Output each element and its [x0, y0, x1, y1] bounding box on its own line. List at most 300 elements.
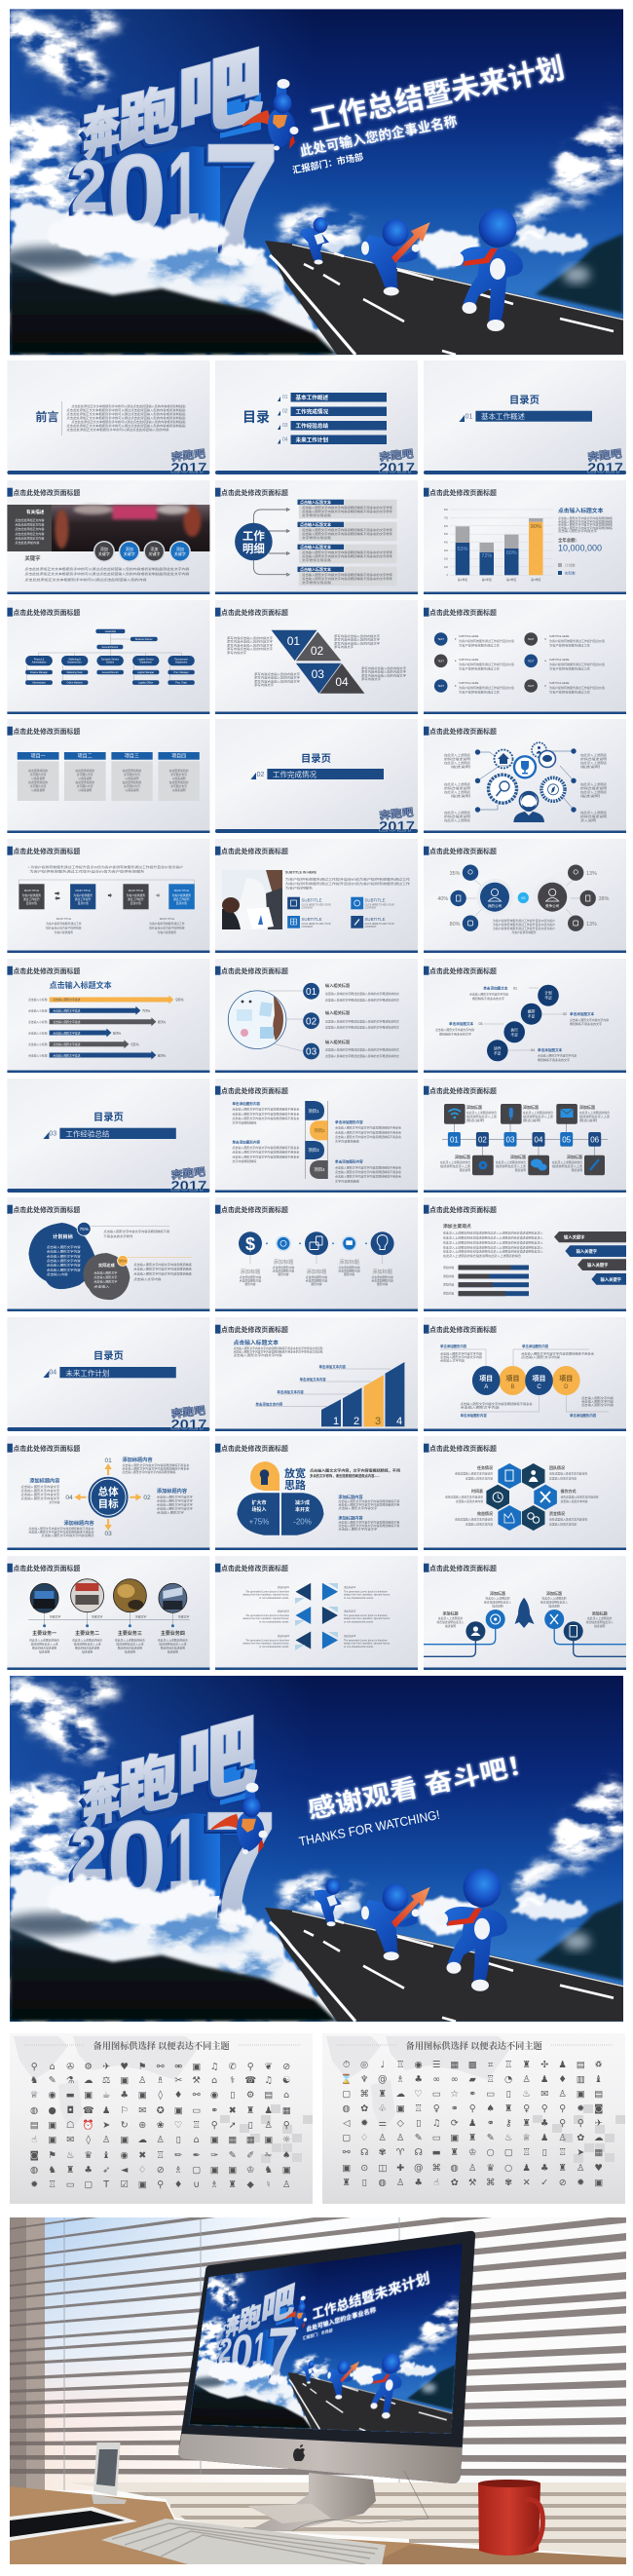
- step labels: [255, 1364, 391, 1407]
- step numbers 01-06: 05: [562, 1135, 572, 1144]
- caption 3: 描述说明: [548, 1604, 560, 1608]
- text blocks: 描述说明: [580, 765, 600, 769]
- text blocks: 的综合描述说明: [580, 814, 607, 818]
- item right 2: TEXT: [528, 659, 535, 663]
- detail box 2: 文字修饰言简意赅: [302, 536, 331, 540]
- keyword tag 1: [554, 1231, 626, 1242]
- note upper left: 点击输入文字内容: [440, 1358, 465, 1362]
- flow box 3: 为客户提供服务: [127, 893, 145, 897]
- bar chart: 53%: [457, 547, 468, 552]
- intro text: 多余的文字修饰，请言简意赅的阐述观点内容......: [310, 1473, 380, 1478]
- org nodes: Finance &: [34, 659, 45, 661]
- milestone 3: 图表的综合描述说明: [118, 1647, 142, 1650]
- photo: crowd: [52, 505, 209, 551]
- text block right 1: 点击输入图形文字内容文字内容需概括精炼不用多余: [335, 1130, 401, 1134]
- step numbers 01-06: 01: [450, 1135, 459, 1144]
- arrow 90%: 点击输入图形文字描述: [53, 998, 81, 1002]
- arrow 70%: 点击输入图形文字描述: [53, 1009, 81, 1013]
- step labels: 单击添加文本内容: [319, 1364, 347, 1369]
- text blocks: 在此录入上述图表: [444, 761, 470, 765]
- text left: or non-characteristic words.: [259, 1597, 289, 1600]
- circle 执行不足: [503, 1021, 525, 1042]
- chart heading and total: 10,000,000: [558, 542, 602, 553]
- note 04: 单击添加图文本: [538, 1047, 563, 1052]
- side text 1: 点击输入图形文字内容文字: [338, 1506, 378, 1510]
- milestone 4: 描述说明: [168, 1650, 178, 1654]
- hexagon: 任务情况: [498, 1463, 521, 1489]
- milestone 2: 描述说明: [82, 1650, 93, 1654]
- note 02: 点击输入图形文字内容文字内容: [570, 1018, 609, 1022]
- detail box 1: 点击输入标题文本: [300, 499, 331, 505]
- body text: 点击此处添加正文文本根据您手中的可以通过点击此按钮输入您的内容或者复制粘贴: [66, 424, 186, 428]
- label 5: 点击添加图形内容: [371, 1275, 393, 1279]
- slide: project A-D ellipses: [424, 1317, 626, 1431]
- upper label 1: 描述说明在此录入上述: [466, 1115, 497, 1118]
- slide: four project cards: [7, 719, 209, 833]
- goal text top: [122, 1456, 190, 1474]
- keyword badges: 关键字: [174, 550, 186, 556]
- title: [424, 1564, 497, 1572]
- callout text 2: 点击输入文字内容: [133, 1277, 162, 1281]
- milestone 1: 主要业务一: [32, 1630, 56, 1637]
- flow box 4: 为客户提供服务: [172, 893, 191, 897]
- label 3: 点击添加图形内容: [306, 1275, 327, 1279]
- title: [7, 847, 80, 855]
- text left: always free from repetition, injected humor,: [242, 1643, 289, 1646]
- icon: compass gear: [541, 777, 565, 801]
- triangles left: [295, 1583, 311, 1650]
- intro text: 为客户提供有效服务通过工作提升自身价值为客户提供有效服务: [29, 870, 145, 874]
- icon grid: ☝▣✉◊♙▣☁♙▯⌂▣▦▦▣☼: [31, 2135, 290, 2145]
- card 2: 在这里添加您的: [75, 769, 94, 773]
- card 1: 文字图片也可: [30, 784, 47, 788]
- description panel: 点击此处添加正文内容: [15, 523, 45, 527]
- goal text top: 点击输入图形文字内容文字内容需概括精炼不用多余: [122, 1463, 190, 1467]
- labels right: 这里输入段落文本内容: [561, 1499, 588, 1503]
- text block left 1: 文字内容概括精炼: [232, 1121, 257, 1125]
- icon: target: [472, 1155, 494, 1175]
- goal text bottom: 点击输入图形文字内容文字内容需概括: [41, 1534, 94, 1537]
- detail box 4: 点击输入标题文本: [300, 566, 331, 572]
- title: 点击此处修改页面标题: [429, 1564, 497, 1572]
- caption 4: 在此录入上述图表的: [587, 1616, 612, 1620]
- icon grid: ◍●◘☎♟⚐✉✪▣▭⚭✖♜♟▦: [30, 2105, 291, 2116]
- text block left 2: 单击添加图形内容: [232, 1139, 261, 1144]
- bar chart: 600: [444, 525, 449, 528]
- body text: 点击此处添加正文文本根据您手中的可以通过点击此按钮输入您的内容或者复制粘贴: [66, 412, 186, 416]
- label 4: 添加标题: [339, 1258, 359, 1266]
- 3D headline: 奔跑吧 2017: 跑: [119, 1746, 178, 1827]
- slide: 目录页 01: [424, 360, 626, 476]
- milestone 4: 描述说明在此录入上述: [159, 1643, 187, 1647]
- text block left 2: 文字内容概括精炼: [232, 1159, 257, 1163]
- figure: large runner: [450, 208, 523, 331]
- panel heading: 备用图标供选择 以便表达不同主题: [406, 2040, 543, 2051]
- actual blob: 实际达成: [98, 1262, 116, 1269]
- right metric 38%: 38%: [599, 896, 610, 902]
- text left: The generated Lorem Ipsum is therefore: [245, 1614, 290, 1617]
- title: [424, 727, 497, 736]
- flow box 2: MAIN TITLE: [76, 889, 91, 892]
- keyword badges: 添加: [126, 546, 133, 551]
- arrow 80%: 80%: [158, 1019, 167, 1025]
- milestone 3: 关键文字: [135, 1613, 147, 1619]
- text blocks: 的综合描述说明: [580, 786, 607, 790]
- subtitle item 1: CLICK HERE TO ADD YOUR: [302, 902, 331, 906]
- step text left top: 添写内容点击输入您的内容文字: [227, 643, 273, 647]
- text right: [344, 1585, 391, 1648]
- item left 1: TEXT: [437, 637, 444, 641]
- card 2: 以用来说明: [78, 777, 92, 780]
- VS badge: [518, 892, 529, 903]
- flow box 3: 通过工作提升: [128, 897, 144, 901]
- note 02: 概括精炼不用多余的文字: [570, 1022, 602, 1026]
- labels left: 任务情况: [477, 1464, 493, 1470]
- cloud in front of letters: [49, 214, 261, 260]
- section bar: 未来工作计划: [65, 1368, 109, 1378]
- card 4: 以用来说明: [172, 777, 186, 780]
- arrow 80%: 点击输入小标题: [28, 1020, 48, 1024]
- caption 3: 在此录入上述图表的: [541, 1596, 567, 1600]
- caption 2: 综合描述说明在此录入: [484, 1600, 511, 1604]
- item right 1: [524, 632, 605, 647]
- point 02: [303, 1009, 399, 1030]
- icon: chat: [528, 1155, 549, 1175]
- point 01: 输入相关标题: [325, 982, 351, 989]
- goal text right: 点击输入图形文字内容文字: [157, 1498, 193, 1502]
- org nodes: Proc. Team: [175, 681, 187, 684]
- section bar: 01: [465, 413, 472, 421]
- 3D headline: 奔跑吧 2017: 跑: [119, 79, 178, 160]
- comparison text: [493, 919, 555, 934]
- text right: or non-characteristic words.: [344, 1621, 374, 1624]
- heading: 目录页: [93, 1349, 124, 1362]
- caption left: MAIN TITLE: [56, 917, 71, 921]
- icon grid: ◙⚑♨♛♝◉✖♖✏✒✑✎✐✁♠: [30, 2150, 290, 2161]
- labels left: 这里输入段落文本内容: [465, 1477, 493, 1481]
- actual blob: 点击输入图形文字: [93, 1270, 118, 1274]
- labels left: 效益情况: [477, 1510, 493, 1516]
- milestone 2: 描述说明在此录入上述: [74, 1643, 101, 1647]
- detail box 1: 文字修饰言简意赅: [302, 513, 331, 517]
- circle 编排不足: 编排: [528, 1009, 536, 1014]
- step bar 4: 4: [396, 1416, 402, 1427]
- note 04: 概括精炼不用多余的文字: [538, 1058, 570, 1062]
- text right: 添加内容05: [344, 1610, 356, 1613]
- arrow 50%: [28, 1029, 122, 1037]
- contents item 01: 01: [282, 395, 288, 400]
- world map backdrop: [326, 2036, 512, 2134]
- text blocks: 在此录入上述图表: [580, 782, 607, 786]
- tab 项目2: 项目2: [314, 1128, 325, 1134]
- arrow 80%: 80%: [158, 1053, 167, 1058]
- text blocks: 在此录入上述图表: [444, 782, 470, 786]
- labels right: 这里输入段落文本内容: [549, 1522, 577, 1526]
- side text 2: [338, 1514, 400, 1532]
- ellipse A: 项目: [479, 1375, 493, 1383]
- milestone 1: 关键文字: [50, 1613, 61, 1619]
- keyword badges: 添加: [150, 546, 158, 551]
- bar chart: 第3季度: [506, 577, 516, 582]
- subtitle item 3: CONTENT: [302, 925, 314, 928]
- note lower left: 单击添加图形内容: [461, 1413, 487, 1418]
- text intro: 点击输入图形文字内容文字内容需概括精炼不用多余的文字修饰请言简意赅: [234, 1346, 323, 1350]
- card 3: 文字图片也可: [124, 784, 140, 788]
- note lower right: 点击输入图形文字内容: [581, 1403, 614, 1407]
- ellipse B: [499, 1366, 527, 1395]
- lower label 1: 添加标题: [455, 1154, 470, 1159]
- tab 项目4: [310, 1160, 328, 1179]
- card 4: 在这里添加您的: [169, 780, 189, 784]
- keyword text: 点击此处添加正文文本根据您手中的可以通过点击此按钮输入您的内容: [24, 578, 147, 582]
- thanks subheading: THANKS FOR WATCHING!: [298, 1807, 441, 1849]
- title: 点击此处修改页面标题: [429, 727, 497, 736]
- caption 2: 在此录入上述图表的: [485, 1596, 510, 1600]
- contents item 04: [278, 435, 387, 444]
- figure: large runner: [444, 1869, 507, 1991]
- label 4: 点击添加图形内容: [338, 1266, 360, 1269]
- text intro: 点击输入图形文字内容文字内容: [234, 1353, 282, 1357]
- text left: The generated Lorem Ipsum is therefore: [245, 1590, 290, 1593]
- callout text 2: 点击输入图形文字内容文字内容需概括精炼: [133, 1268, 192, 1271]
- step text right top: 添写内容点击输入您的内容文字: [334, 641, 380, 645]
- text intro: [234, 1339, 323, 1357]
- subtitle item 4: SUBTITLE: [364, 917, 386, 922]
- side text 1: 添加标题内容: [338, 1494, 363, 1500]
- card 2: 项目二: [78, 754, 93, 760]
- label 5: 点击添加图形内容: [371, 1278, 393, 1282]
- note 01: 01: [513, 986, 517, 990]
- labels left: [445, 1464, 493, 1526]
- arrow 80%: 点击输入图形文字描述: [53, 1053, 81, 1057]
- plan blob: 计划目标: [53, 1232, 74, 1240]
- blob 扩大市场投入: [237, 1493, 279, 1535]
- timeline axis: [28, 1612, 190, 1625]
- chart heading and total: 点击输入图形文字内容文字: [558, 529, 597, 533]
- text left: 添加内容01: [278, 1585, 290, 1589]
- title: 点击此处修改页面标题: [13, 1205, 80, 1214]
- text left: The generated Lorem Ipsum is therefore: [245, 1639, 290, 1642]
- contents item 02: [278, 407, 387, 416]
- intro text: [310, 1467, 401, 1478]
- note upper right: [521, 1344, 594, 1359]
- caption 2: 描述说明: [492, 1604, 503, 1608]
- callout text 2: [133, 1263, 192, 1281]
- title: [215, 1325, 288, 1334]
- ellipse A: [472, 1366, 501, 1395]
- card 1: 文字图片也可: [30, 773, 47, 777]
- subtitle item 1: CONTENT: [302, 906, 314, 910]
- text right: The generated Lorem Ipsum is therefore: [344, 1639, 388, 1642]
- bar chart: 800: [444, 509, 449, 511]
- subtitle and text: 为客户提供有效服务通过工作提升自身价值为客户提供有效服务通过工作: [285, 882, 410, 886]
- 3D block behind letters: [97, 1760, 256, 1906]
- stacked bars: [443, 1265, 529, 1296]
- right metric 13%: [568, 916, 597, 931]
- main point text: [443, 1223, 543, 1258]
- text blocks: 在此录入上述图表: [444, 790, 470, 794]
- stacked bars: 添加内容: [443, 1283, 454, 1287]
- slide: hexagon ring: [424, 1436, 626, 1550]
- circle 协作不足: 不足: [494, 1050, 502, 1055]
- icon: house gear: [495, 750, 512, 768]
- heading: 前言: [35, 409, 58, 424]
- desk wood right: [370, 2545, 626, 2564]
- icon grid: ⚲⌂✇⚙✈♥⚑⚯⚮▣♫✆⚲❦⊘: [31, 2062, 290, 2072]
- slide: triangle steps: [215, 600, 418, 714]
- point 01: [303, 982, 399, 1002]
- right company circle: 竞争公司: [545, 903, 560, 908]
- card 3: 以用来说明: [125, 788, 139, 792]
- bar chart: 100: [444, 566, 449, 569]
- keyword tag 1: 输入关键字: [564, 1234, 585, 1241]
- bar chart: 90%: [531, 524, 541, 530]
- step bar 1: [321, 1399, 341, 1427]
- circle 执行不足: 执行: [510, 1027, 518, 1032]
- intro text: • 为客户提供有效服务通过工作提升自身价值为客户提供有效服务通过工作提升自身价值为客户: [28, 865, 183, 869]
- icon: envelope: [556, 1104, 577, 1124]
- slide: project tabs: [215, 1079, 418, 1193]
- point 02: 这里输入简单的文字概述这里输入简单的文字概述简单的文: [325, 1019, 399, 1023]
- note 03: 单击添加图文本: [449, 1021, 474, 1026]
- lower label 3: 描述说明在此录入上述: [552, 1164, 582, 1168]
- text right: always free from repetition, injected humor,: [344, 1643, 391, 1646]
- label 5: [371, 1268, 393, 1286]
- centre ellipse: [89, 1477, 129, 1518]
- photo 1: [30, 1583, 58, 1612]
- arrow 65%: 65%: [130, 1042, 139, 1046]
- keyword tag 2: [565, 1245, 626, 1257]
- text block left 1: 单击添加图形内容: [232, 1101, 261, 1106]
- text block right 1: [335, 1119, 401, 1144]
- note 04: [531, 1047, 577, 1062]
- caption 2: [484, 1590, 511, 1608]
- big heading: [284, 1466, 306, 1492]
- stacked bars: 添加内容: [443, 1266, 454, 1269]
- title: [215, 488, 288, 497]
- step text right bottom: 添写内容点击输入您的内容文字: [361, 670, 406, 674]
- bar chart: 400: [444, 542, 449, 545]
- blob 减少成本开支: [281, 1493, 323, 1535]
- contents item 04: 04: [282, 436, 288, 442]
- card 1: 项目一: [31, 754, 46, 760]
- org nodes: Marketing &: [69, 658, 81, 661]
- upper label 3: [579, 1104, 610, 1122]
- note 03: [435, 1021, 483, 1037]
- title: [215, 608, 288, 617]
- detail box 3: 文字修饰言简意赅: [302, 558, 331, 562]
- note 01: 点击输入图形文字内容文字内容: [469, 992, 508, 996]
- card 2: 文字图片也可: [77, 773, 93, 777]
- keyword badges: 关键字: [124, 550, 135, 556]
- labels left: 请在这里输入段落文本内容请在: [455, 1471, 493, 1475]
- milestone 3: [115, 1613, 147, 1654]
- subtitle and text: SUBTITLE IN HERE: [285, 871, 317, 875]
- goal text bottom: 点击输入图形文字内容文字内容需概括精炼不用多余: [28, 1527, 94, 1531]
- title: [215, 1086, 288, 1095]
- contents item 03: 03: [282, 423, 288, 429]
- branching arrows: [253, 509, 289, 576]
- upper label 1: 图表说明: [466, 1118, 484, 1122]
- keyword badges: 关键字: [98, 550, 110, 556]
- lower label 3: [552, 1154, 582, 1172]
- caption right: 为客户提供有效服务通过工作: [149, 922, 185, 926]
- card 2: 在这里添加您的: [75, 780, 94, 784]
- text block right 2: 点击输入图形文字内容文字内容需概括精炼不用多余: [335, 1170, 401, 1174]
- goal text left: [20, 1477, 60, 1504]
- tab 项目3: [305, 1141, 324, 1159]
- left company circle: [476, 879, 513, 915]
- logo: 2017: [379, 460, 415, 476]
- point 03: 这里输入简单的文字概述这里输入简单的文字概述简单的文: [325, 1048, 399, 1052]
- caption left: 为客户提供服务: [55, 930, 73, 934]
- text left: 添加内容03: [278, 1634, 290, 1638]
- text intro: 点击输入图形文字内容文字内容需概括精炼不用多余的文字修饰请言简意赅: [234, 1349, 323, 1353]
- step numbers 01-06: 03: [506, 1135, 515, 1144]
- side text 2: 添加标题内容: [338, 1514, 363, 1522]
- text block right 1: 单击添加图形内容: [335, 1119, 363, 1124]
- keyboard: [101, 2519, 386, 2566]
- 3D block behind letters: [97, 93, 261, 239]
- pixel squares: [220, 2104, 313, 2163]
- labels left: 这里输入段落文本内容: [465, 1522, 493, 1526]
- org nodes: Finance Manager: [30, 671, 48, 674]
- title: 点击此处修改页面标题: [221, 1086, 288, 1095]
- milestone 2: 图表的综合描述说明: [75, 1647, 99, 1650]
- slide: photo with subtitles: [215, 839, 418, 953]
- section bar: 工作完成情况: [273, 770, 316, 779]
- caption 3: 综合描述说明在此录入: [540, 1600, 568, 1604]
- goal text right: 添加标题内容: [157, 1487, 188, 1495]
- keyword tag 3: 输入关键字: [587, 1262, 609, 1269]
- goal number labels: 04: [65, 1495, 73, 1501]
- logo: 奔跑吧: [170, 446, 206, 464]
- subtitle item 2: SUBTITLE: [364, 898, 386, 902]
- step bar 4: [386, 1362, 404, 1427]
- section bar: [250, 769, 384, 779]
- keyword tag 4: 输入关键字: [600, 1276, 622, 1283]
- tab 项目2: [310, 1120, 328, 1140]
- step labels: 单击添加文本内容: [255, 1401, 283, 1407]
- goal number labels: 02: [143, 1495, 151, 1501]
- flow box 3: [123, 884, 149, 909]
- circle 计划不足: 不足: [544, 996, 552, 1001]
- plan blob: 点击输入图形文字内容: [47, 1254, 81, 1258]
- scene reused: [0, 1666, 633, 2022]
- point 03: [303, 1039, 399, 1059]
- left metric 35%: [450, 865, 478, 881]
- card 1: 在这里添加您的: [28, 769, 48, 773]
- bar chart: 300: [444, 549, 449, 552]
- logo: [170, 1164, 206, 1194]
- labels left: 请在这里输入段落文本内容请在: [445, 1495, 483, 1498]
- icon: chat ring: [540, 750, 555, 768]
- circle 执行不足: 不足: [510, 1032, 518, 1037]
- keyword text: [24, 554, 190, 582]
- circle icon 4: [564, 1621, 583, 1641]
- text blocks: 在此录入上述图表: [580, 790, 607, 794]
- right company circle: [534, 879, 571, 915]
- caption 1: 综合描述说明在此录入: [437, 1620, 465, 1624]
- card 4: 文字图片也可: [170, 773, 187, 777]
- icon: wifi: [444, 1104, 465, 1124]
- card 2: 以用来说明: [78, 788, 92, 792]
- callout text 2: 点击输入图形文字内容文字内容需概括精炼: [133, 1263, 192, 1267]
- card 3: 在这里添加您的: [123, 780, 141, 784]
- detail box 2: [298, 521, 397, 541]
- point 01: 这里输入简单的文字概述这里输入简单的文字概述简单的文: [325, 992, 399, 996]
- lower label 2: 描述说明在此录入上述: [496, 1164, 526, 1168]
